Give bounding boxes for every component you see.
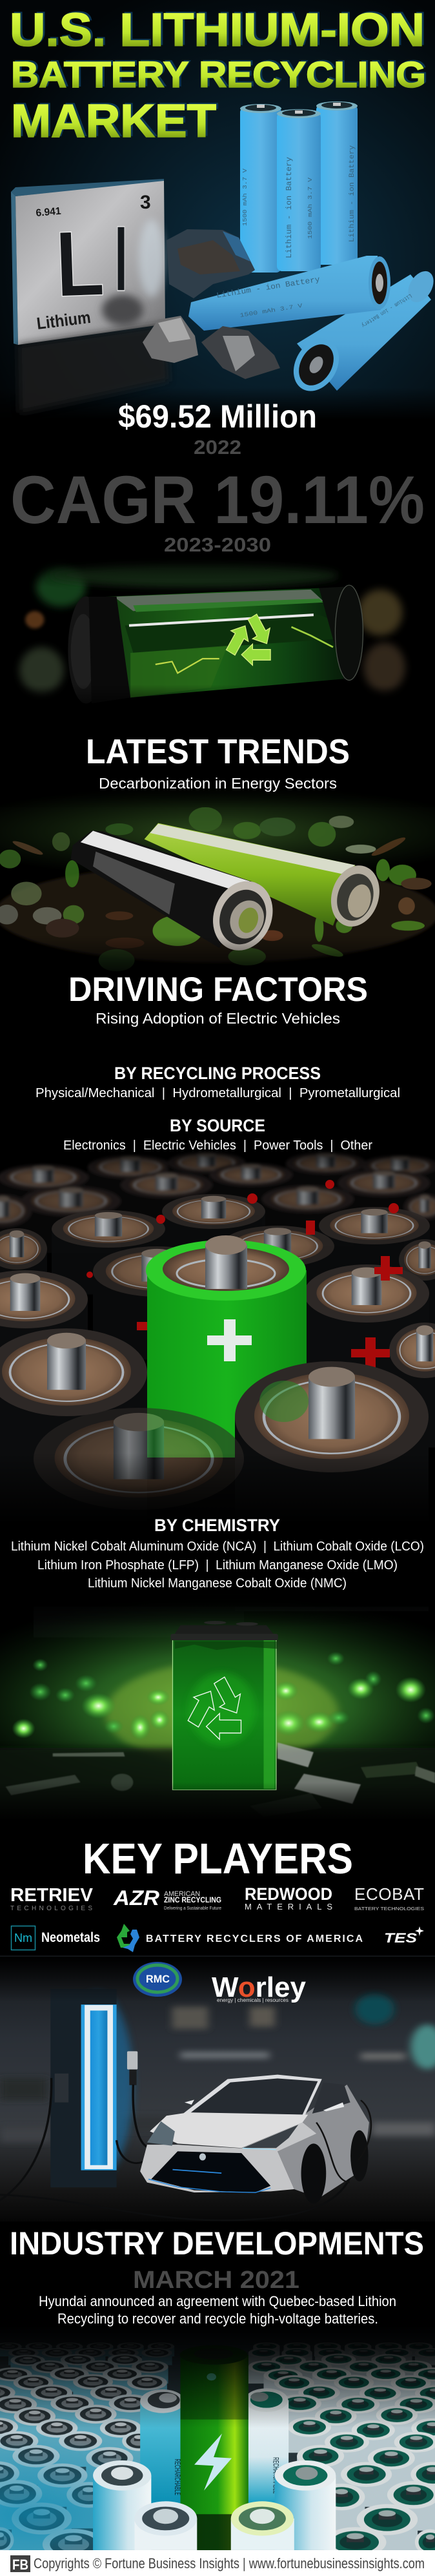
icon: battery lying lower right: Lithium - ion Battery	[360, 292, 413, 329]
heading: key players: KEY PLAYERS	[83, 1835, 353, 1883]
text: chemistry segments: Lithium Nickel Cobalt Aluminum Oxide (NCA) | Lithium Cobalt Oxide (LCO)	[11, 1540, 424, 1554]
text: chemistry segments: Lithium Iron Phosphate (LFP) | Lithium Manganese Oxide (LMO)	[37, 1558, 398, 1572]
logo: Neometals: Nm	[14, 1932, 32, 1944]
logo: Ecobat: ECOBAT	[354, 1884, 424, 1904]
icon: tilted blue battery: Lithium - ion Battery	[216, 275, 321, 300]
logo: Neometals	[12, 1926, 100, 1950]
logo: American Zinc Recycling: Delivering a Sustainable Future	[164, 1906, 221, 1911]
logo: Battery Recyclers of America: BATTERY RECYCLERS OF AMERICA	[146, 1933, 363, 1944]
logo: American Zinc Recycling	[113, 1886, 221, 1911]
icon: green battery	[146, 1235, 307, 1458]
text: development description: Recycling to recover and recycle high-voltage batteries.	[57, 2311, 378, 2327]
heading: by recycling process: BY RECYCLING PROCESS	[114, 1064, 321, 1083]
icon: green battery body	[68, 585, 363, 704]
icon: white electric car	[140, 2075, 371, 2203]
icon: recycling symbol	[180, 1677, 247, 1748]
panel: dark battery array with green battery	[0, 1152, 435, 1638]
text: driving factor: Rising Adoption of Electric Vehicles	[96, 1010, 340, 1027]
text: development date: MARCH 2021	[133, 2267, 299, 2294]
logo: RMC	[133, 1962, 182, 1997]
icon: front small batteries	[93, 2460, 336, 2550]
logo: American Zinc Recycling: AZR	[113, 1886, 159, 1910]
panel: batteries on leaves scene	[0, 785, 435, 971]
market size value: $69.52 Million	[118, 398, 317, 435]
icon: green battery	[145, 823, 385, 931]
text: rechargeable battery labels	[173, 2457, 280, 2495]
text: latest trend: Decarbonization in Energy Sectors	[99, 775, 337, 792]
icon: small lithium rocks	[143, 316, 280, 379]
blurred city background	[0, 1994, 435, 2143]
title: BATTERY RECYCLING	[13, 53, 428, 94]
logo: American Zinc Recycling: ZINC RECYCLING	[164, 1895, 221, 1904]
title: MARKET	[11, 96, 216, 147]
logo: TES	[384, 1926, 424, 1946]
forecast period: 2023-2030	[164, 533, 271, 556]
heading: latest trends: LATEST TRENDS	[86, 732, 350, 771]
logo: TES: TES	[384, 1931, 417, 1946]
market size year: 2022	[194, 436, 241, 459]
text: rechargeable battery labels: RECHARCHABLE	[271, 2457, 280, 2494]
icon: lithium element tile: 3	[140, 192, 151, 213]
icon: lithium element tile: Lithium	[35, 307, 92, 333]
heading: driving factors: DRIVING FACTORS	[68, 971, 368, 1009]
foreground neighbouring batteries	[0, 1264, 435, 1448]
title: U.S. LITHIUM-ION	[12, 3, 427, 55]
icon: lithium element tile	[11, 179, 169, 413]
text: development description: Hyundai announced an agreement with Quebec-based Lithion	[39, 2293, 396, 2309]
hero panel: lithium element and blue batteries	[0, 0, 435, 420]
text: chemistry segments: Lithium Nickel Manganese Cobalt Oxide (NMC)	[88, 1576, 347, 1591]
bokeh lights	[12, 1652, 435, 1740]
leaves and soil	[0, 807, 432, 971]
logo: Battery Recyclers of America	[117, 1924, 363, 1952]
foreground batteries	[0, 1328, 429, 1638]
footer	[0, 2550, 435, 2576]
title: U.S. LITHIUM-ION	[10, 5, 425, 56]
logo: Fortune Business Insights: FB	[12, 2557, 28, 2573]
icon: lithium ore rock large	[167, 229, 255, 298]
logo: Ecobat: BATTERY TECHNOLOGIES	[354, 1906, 424, 1911]
logo: Neometals: Neometals	[41, 1930, 100, 1945]
title	[10, 3, 428, 147]
logo: Retriev Technologies: TECHNOLOGIES	[10, 1905, 92, 1912]
icon: cyan and white tall batteries	[140, 2388, 288, 2504]
logo: Worley: Worley	[212, 1972, 307, 2003]
icon: battery lying lower right	[285, 267, 435, 399]
heading: by chemistry: BY CHEMISTRY	[154, 1516, 280, 1535]
text: rechargeable battery labels: RECHARCHABLE	[173, 2458, 181, 2495]
text: source segments: Electronics | Electric Vehicles | Power Tools | Other	[63, 1139, 372, 1153]
icon: recycling symbol on battery	[219, 614, 275, 672]
panel: glowing green recycling battery scene	[0, 1593, 435, 1821]
icon: three upright blue batteries: 1500 mAh 3.7 V	[307, 177, 314, 239]
logo: Retriev Technologies: RETRIEV	[10, 1885, 94, 1906]
text: chemistry segments	[11, 1540, 424, 1591]
panel: green recycling battery scene	[19, 564, 405, 704]
distant battery rows	[0, 1152, 435, 1267]
panel: EV charging station scene	[0, 1955, 435, 2234]
red polarity marks	[86, 1180, 403, 1370]
icon: silver battery	[71, 830, 281, 956]
icon: tilted blue battery	[188, 256, 390, 331]
text: recycling process segments: Physical/Mechanical | Hydrometallurgical | Pyrometallurgical	[35, 1086, 400, 1100]
mid battery rows	[0, 1194, 435, 1360]
logo: American Zinc Recycling: AMERICAN	[164, 1890, 200, 1898]
icon: tall green battery	[180, 2345, 248, 2550]
title: MARKET	[13, 94, 218, 146]
icon: three upright blue batteries: 1500 mAh 3.7 V	[242, 168, 248, 226]
logo: Redwood Materials: REDWOOD	[245, 1884, 332, 1904]
icon: lithium element tile: L	[54, 211, 106, 316]
icon: lithium element tile: I	[114, 207, 128, 311]
panel: battery field with tall green battery	[0, 2325, 435, 2576]
icon: charging station	[0, 1989, 352, 2220]
icon: lithium element tile: 6.941	[35, 206, 61, 219]
logo: RMC: RMC	[146, 1973, 170, 1985]
text: development description	[39, 2293, 396, 2327]
logo: Worley: energy | chemicals | resources	[217, 1997, 288, 2003]
heading: by source: BY SOURCE	[170, 1116, 265, 1135]
icon: green battery	[170, 1621, 278, 1790]
icon: tilted blue battery: 1500 mAh 3.7 V	[239, 303, 303, 319]
icon: three upright blue batteries	[240, 101, 358, 273]
battery rubble	[0, 1742, 435, 1821]
rows of small batteries	[0, 2342, 435, 2576]
icon: three upright blue batteries: Lithium - ion Battery	[349, 145, 356, 242]
logo: Redwood Materials: MATERIALS	[245, 1902, 332, 1911]
logo: Redwood Materials	[245, 1884, 332, 1911]
icon: three upright blue batteries: Lithium - ion Battery	[285, 157, 294, 258]
title: BATTERY RECYCLING	[11, 54, 426, 96]
